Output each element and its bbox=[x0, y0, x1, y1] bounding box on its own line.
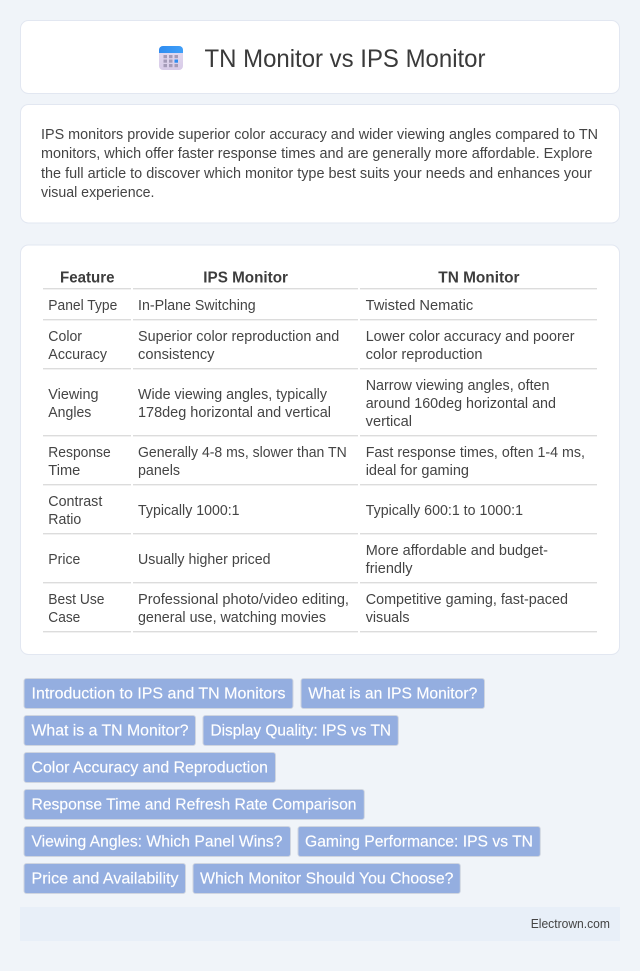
button: which monitor: Which Monitor Should You Choose? bbox=[200, 871, 454, 888]
row: best use case: Case bbox=[48, 610, 80, 626]
row: price: friendly bbox=[366, 561, 413, 577]
row: color accuracy: consistency bbox=[138, 347, 215, 363]
row: response time: Response bbox=[48, 445, 111, 461]
button: which monitor bbox=[193, 864, 460, 894]
button: response time: Response Time and Refresh Rate Comparison bbox=[32, 797, 356, 814]
row: response time: Generally 4-8 ms, slower than TN bbox=[138, 445, 347, 461]
icon: monitor grid bbox=[159, 46, 183, 70]
button: display quality bbox=[203, 716, 398, 746]
row: panel type: In-Plane Switching bbox=[138, 298, 256, 314]
button: viewing angles bbox=[24, 826, 290, 856]
row: response time: panels bbox=[138, 463, 180, 479]
row: viewing angles: vertical bbox=[366, 414, 412, 430]
row: best use case: Competitive gaming, fast-paced bbox=[366, 592, 568, 608]
panel: comparison table bbox=[20, 245, 620, 654]
button: introduction bbox=[24, 678, 293, 708]
button: what is IPS bbox=[301, 678, 484, 708]
row: panel type: Twisted Nematic bbox=[366, 298, 473, 314]
intro text: monitors, which offer faster response times and are generally more affordable. Explore bbox=[41, 146, 592, 162]
row: price: More affordable and budget- bbox=[366, 543, 548, 559]
panel: title header bbox=[20, 20, 620, 94]
row: viewing angles: Narrow viewing angles, often bbox=[366, 378, 550, 394]
panel: introduction bbox=[20, 104, 620, 223]
row: response time: ideal for gaming bbox=[366, 463, 469, 479]
footer source text: Electrown.com bbox=[531, 917, 610, 931]
row: viewing angles: 178deg horizontal and vertical bbox=[138, 405, 331, 421]
row: contrast ratio: Typically 1000:1 bbox=[138, 503, 240, 519]
row: viewing angles: around 160deg horizontal and bbox=[366, 396, 556, 412]
row: contrast ratio: Typically 600:1 to 1000:1 bbox=[366, 503, 523, 519]
button: display quality: Display Quality: IPS vs TN bbox=[210, 723, 391, 740]
row: color accuracy: Accuracy bbox=[48, 347, 108, 363]
row: contrast ratio: Contrast bbox=[48, 494, 102, 510]
row: color accuracy: Lower color accuracy and poorer bbox=[366, 329, 575, 345]
row: viewing angles: Angles bbox=[48, 405, 91, 421]
table header row: TN Monitor bbox=[438, 270, 520, 287]
title: TN Monitor vs IPS Monitor bbox=[204, 45, 486, 73]
row: viewing angles: Wide viewing angles, typically bbox=[138, 387, 328, 403]
panel: topic link buttons bbox=[24, 678, 540, 894]
row: color accuracy bbox=[48, 329, 575, 363]
row: price: Usually higher priced bbox=[138, 552, 270, 568]
row: viewing angles: Viewing bbox=[48, 387, 98, 403]
row: panel type bbox=[48, 298, 473, 314]
row: best use case: general use, watching movies bbox=[138, 610, 326, 626]
button: price bbox=[24, 864, 186, 894]
row: best use case bbox=[48, 592, 568, 626]
intro text bbox=[41, 127, 598, 201]
button: what is TN: What is a TN Monitor? bbox=[32, 723, 189, 740]
button: what is IPS: What is an IPS Monitor? bbox=[308, 686, 477, 703]
button: response time bbox=[24, 790, 364, 820]
button: color accuracy: Color Accuracy and Reproduction bbox=[32, 760, 268, 777]
button: gaming performance: Gaming Performance: IPS vs TN bbox=[305, 834, 533, 851]
table header row: IPS Monitor bbox=[203, 270, 288, 287]
row: contrast ratio: Ratio bbox=[48, 512, 81, 528]
row: response time: Time bbox=[48, 463, 80, 479]
footer bar bbox=[20, 907, 620, 941]
intro text: the full article to discover which monitor type best suits your needs and enhances your bbox=[41, 166, 592, 182]
row: response time: Fast response times, often 1-4 ms, bbox=[366, 445, 585, 461]
table header row: Feature bbox=[60, 270, 115, 287]
row: contrast ratio bbox=[48, 494, 523, 528]
row: best use case: visuals bbox=[366, 610, 410, 626]
intro text: visual experience. bbox=[41, 185, 154, 201]
button: color accuracy bbox=[24, 752, 276, 782]
row: price bbox=[48, 543, 548, 577]
row: color accuracy: color reproduction bbox=[366, 347, 482, 363]
button: gaming performance bbox=[298, 826, 540, 856]
button: introduction: Introduction to IPS and TN Monitors bbox=[32, 686, 286, 703]
intro text: IPS monitors provide superior color accuracy and wider viewing angles compared to TN bbox=[41, 127, 598, 143]
row: response time bbox=[48, 445, 585, 479]
button: what is TN bbox=[24, 716, 196, 746]
row: color accuracy: Superior color reproduction and bbox=[138, 329, 339, 345]
row: panel type: Panel Type bbox=[48, 298, 117, 314]
row: price: Price bbox=[48, 552, 80, 568]
button: viewing angles: Viewing Angles: Which Panel Wins? bbox=[32, 834, 283, 851]
row: best use case: Professional photo/video editing, bbox=[138, 592, 349, 608]
button: price: Price and Availability bbox=[32, 871, 178, 888]
row: best use case: Best Use bbox=[48, 592, 104, 608]
row: viewing angles bbox=[48, 378, 556, 430]
table header row bbox=[60, 270, 520, 287]
row: color accuracy: Color bbox=[48, 329, 82, 345]
